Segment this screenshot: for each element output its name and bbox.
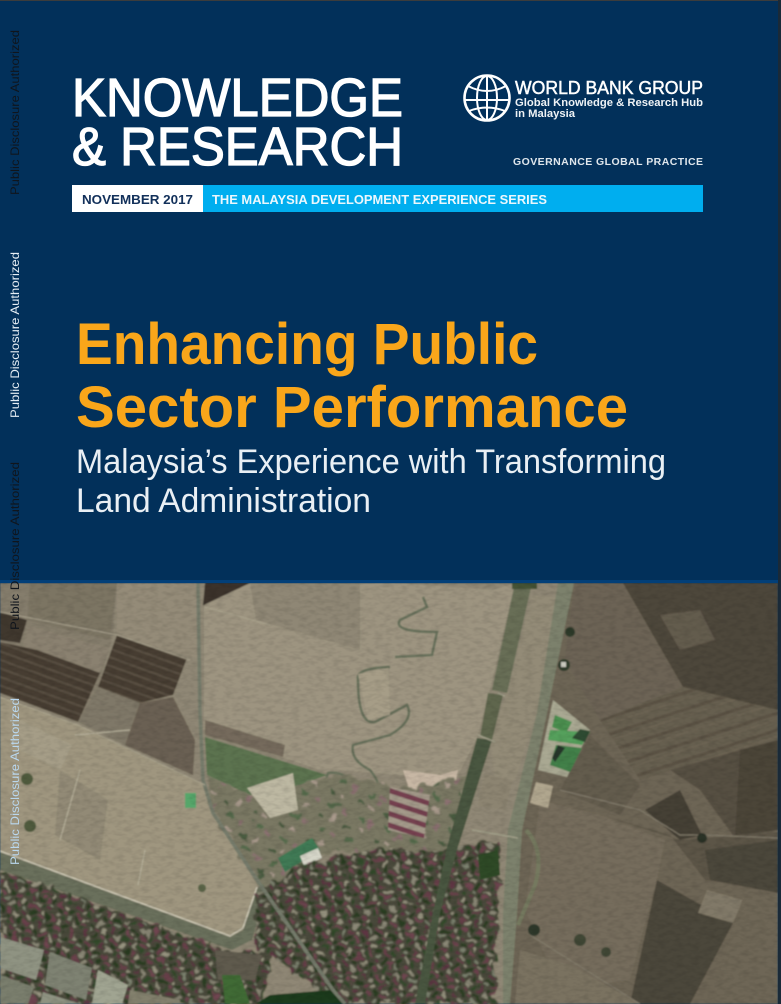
aerial photograph of farmland and village: [0, 583, 778, 1004]
field boundaries: [0, 607, 270, 785]
date text: NOVEMBER 2017: [82, 192, 193, 207]
masthead: Knowledge & Research: [72, 68, 403, 177]
factory with green roofs: [530, 700, 590, 808]
main village: [255, 840, 500, 1004]
main title: [76, 312, 628, 440]
hub location: in Malaysia: [515, 108, 576, 120]
main title: Enhancing Public: [76, 312, 538, 377]
central fields and meander: [204, 583, 515, 802]
hub name: Global Knowledge & Research Hub: [515, 97, 703, 109]
subtitle: Malaysia’s Experience with Transforming: [76, 443, 666, 481]
disclosure stamp 3: Public Disclosure Authorized: [8, 462, 22, 630]
southern strip of houses: [0, 870, 275, 1004]
right farmland: [510, 583, 778, 1004]
main title: Sector Performance: [76, 375, 628, 440]
subtitle: [76, 443, 666, 520]
lower left pale field: [0, 697, 257, 937]
sparse settlement beside the road: [205, 740, 478, 890]
masthead: Knowledge & Research: KNOWLEDGE: [72, 68, 403, 128]
disclosure stamp 2: Public Disclosure Authorized: [8, 252, 22, 418]
icon: globe: [464, 76, 510, 120]
disclosure stamp 1: Public Disclosure Authorized: [8, 30, 22, 195]
series text: THE MALAYSIA DEVELOPMENT EXPERIENCE SERIES: [212, 192, 547, 207]
main road: [198, 583, 345, 1004]
disclosure stamp 4: Public Disclosure Authorized: [8, 698, 22, 865]
logo: World Bank Group: [464, 76, 703, 120]
subtitle: Land Administration: [76, 482, 371, 520]
series bar: [203, 185, 703, 212]
small green court: [185, 793, 196, 808]
masthead: Knowledge & Research: & RESEARCH: [72, 117, 403, 177]
upper left fields: [0, 583, 256, 775]
canal embankment: [0, 851, 268, 950]
practice label: GOVERNANCE GLOBAL PRACTICE: [513, 156, 703, 168]
organisation name: WORLD BANK GROUP: [515, 78, 703, 98]
date tag: [72, 185, 203, 212]
fish ponds: [0, 937, 262, 1004]
central long field and canals: [415, 583, 707, 1004]
date and series banner: [72, 185, 703, 212]
